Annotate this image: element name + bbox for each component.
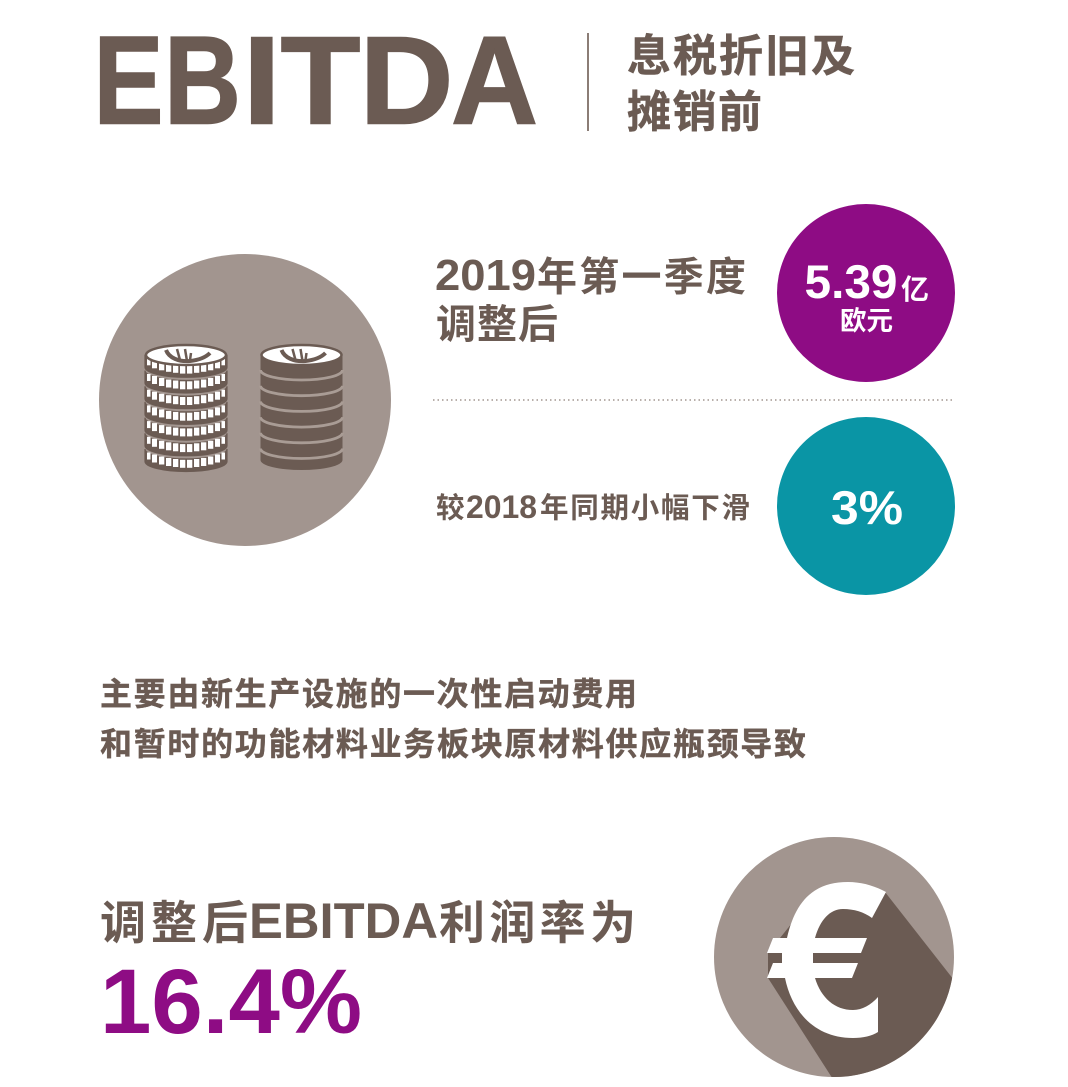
- icon: outlined coin stack: [145, 345, 227, 471]
- margin value: 16.4%: 16.4%: [100, 951, 362, 1053]
- purple circle: 5.39亿欧元: [777, 204, 955, 382]
- explanatory text: 和暂时的功能材料业务板块原材料供应瓶颈导致: [100, 726, 806, 762]
- icon: euro in grey circle with long shadow: [714, 837, 968, 1087]
- purple circle: 5.39亿欧元: 5.39: [804, 255, 898, 308]
- subtitle: [627, 32, 855, 137]
- title: EBITDA: B: [164, 12, 241, 150]
- title: EBITDA: I: [242, 12, 281, 150]
- purple circle: 5.39亿欧元: 欧元: [840, 306, 893, 336]
- title: EBITDA: A: [451, 12, 538, 150]
- margin heading: 调整后: [100, 897, 248, 949]
- comparison text: 年同期小幅下滑: [540, 492, 750, 524]
- explanatory text: 主要由新生产设施的一次性启动费用: [100, 676, 637, 712]
- comparison text: [436, 489, 750, 525]
- title: EBITDA: D: [360, 12, 454, 150]
- teal circle: 3%: 3%: [831, 481, 903, 534]
- subtitle: 摊销前: [627, 88, 762, 137]
- title: EBITDA: E: [94, 12, 164, 150]
- heading: 2019 Q1 adjusted: 年第一季度: [537, 256, 746, 300]
- explanatory text: [100, 676, 806, 762]
- margin heading: [100, 893, 636, 949]
- dotted separator: [433, 399, 952, 401]
- purple circle: 5.39亿欧元: 亿: [901, 274, 929, 305]
- heading: 2019 Q1 adjusted: [435, 251, 746, 347]
- comparison text: 较: [436, 492, 465, 524]
- margin heading: EBITDA: [249, 893, 438, 949]
- title: EBITDA: [94, 12, 538, 150]
- icon: solid coin stack: [260, 345, 342, 470]
- euro sign: [767, 882, 886, 1038]
- comparison text: 2018: [466, 489, 537, 525]
- margin heading: 利润率为: [439, 897, 636, 949]
- divider line: [587, 33, 589, 131]
- icon: coin stacks in grey circle: [99, 254, 391, 546]
- title: EBITDA: T: [280, 12, 360, 150]
- long shadow: [768, 892, 952, 1077]
- subtitle: 息税折旧及: [627, 32, 855, 81]
- teal circle: 3%: [777, 417, 955, 595]
- heading: 2019 Q1 adjusted: 调整后: [436, 303, 558, 347]
- heading: 2019 Q1 adjusted: 2019: [435, 251, 536, 300]
